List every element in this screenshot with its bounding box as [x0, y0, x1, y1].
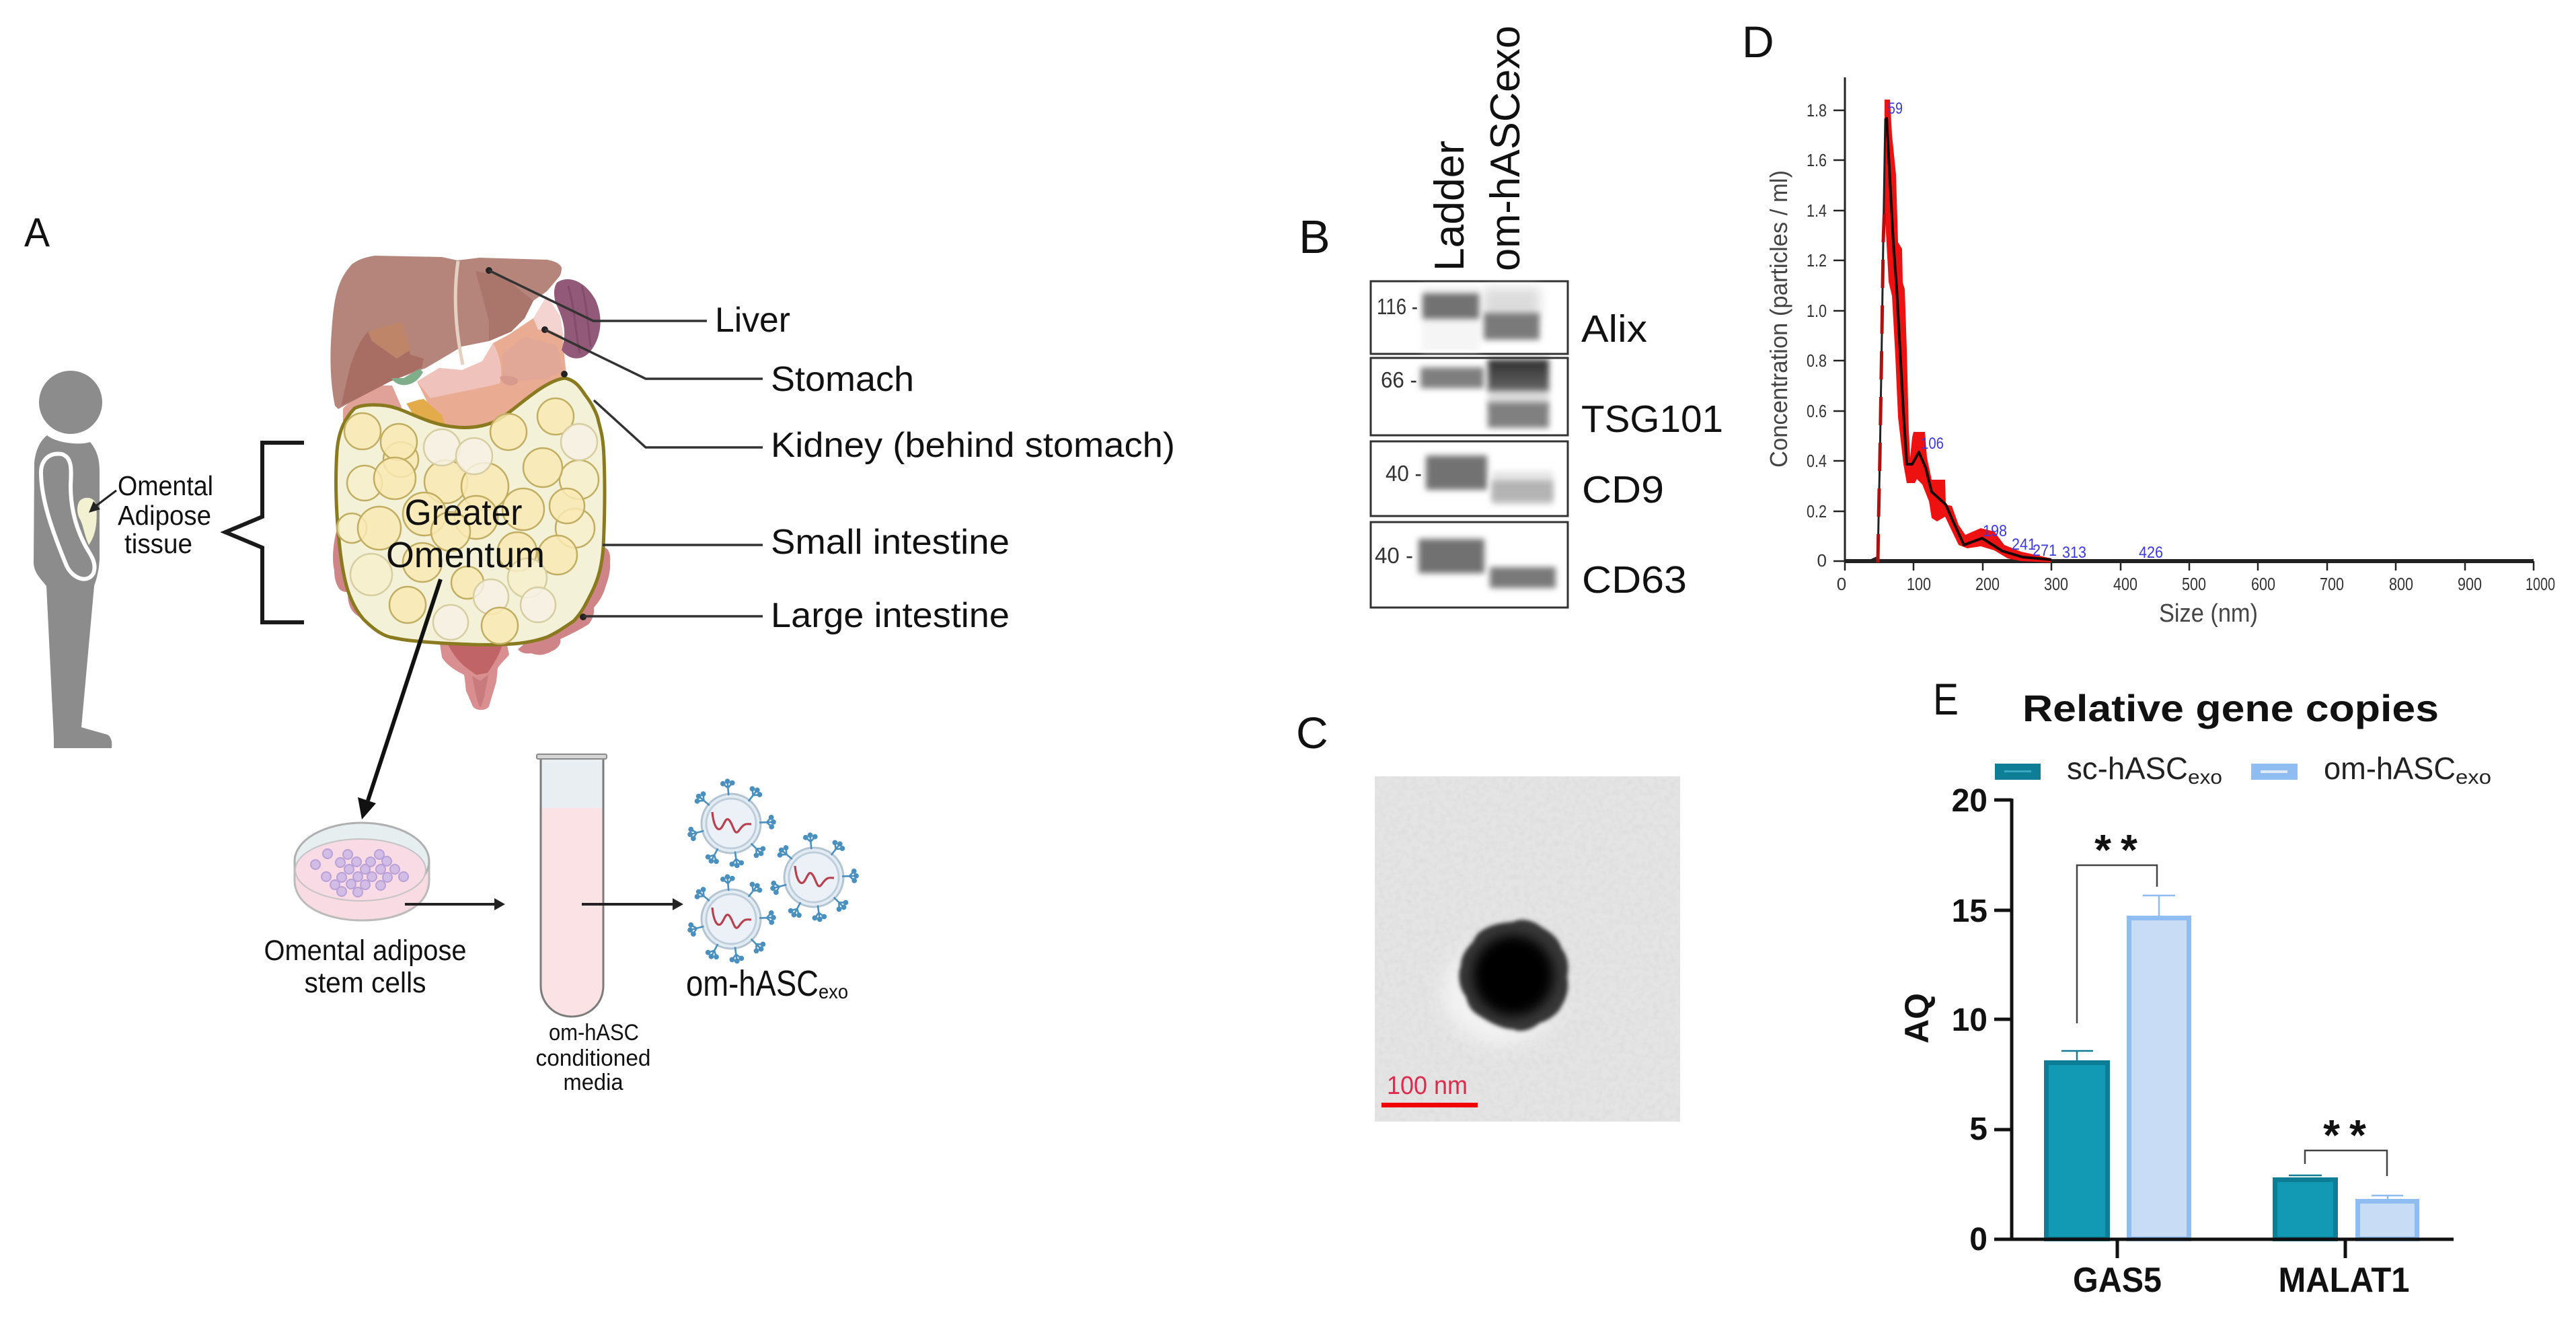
axes and ticks [1994, 799, 2454, 1258]
y tick labels [1807, 100, 1827, 571]
peak labels: 59 [1888, 100, 1903, 118]
legend: om-hASCexo: exo [2456, 766, 2491, 789]
blot: TSG101: 66 - [1381, 367, 1417, 392]
leader line: Liver [486, 267, 707, 321]
peak labels [1888, 100, 2163, 562]
y tick labels: 5 [1969, 1111, 1987, 1147]
y tick labels: 10 [1952, 1002, 1987, 1038]
y tick labels: 15 [1952, 893, 1987, 929]
gallbladder [391, 369, 423, 385]
x tick labels: 400 [2113, 574, 2137, 594]
y tick labels: 20 [1952, 783, 1987, 819]
legend: sc-hASCexo: exo [2188, 766, 2222, 789]
x tick labels: 300 [2044, 574, 2068, 594]
x tick labels: 0 [1837, 574, 1846, 594]
peak labels: 198 [1983, 522, 2007, 540]
blot: CD63 [1371, 522, 1568, 608]
particle body [1459, 920, 1568, 1031]
panel letter E: E [1933, 674, 1959, 724]
text: Greater Omentum: Omentum [386, 535, 545, 575]
panel letter A: A [24, 210, 50, 255]
blot: CD9: 40 - [1386, 461, 1422, 486]
y tick labels: 0.2 [1807, 501, 1827, 521]
blot: CD63: 40 - [1375, 543, 1413, 568]
x tick labels: 600 [2251, 574, 2275, 594]
pancreas [406, 399, 447, 431]
text: om-hASC conditioned media: om-hASC [549, 1020, 639, 1046]
text: om-hASC conditioned media: conditioned [535, 1046, 651, 1071]
label: Small intestine: Small intestine [771, 523, 1010, 562]
scale bar: 100 nm: 100 nm [1387, 1072, 1468, 1100]
blot: Alix [1371, 281, 1568, 354]
leader line: Large intestine [580, 614, 763, 620]
column header: om-hASCexo: om-hASCexo [1482, 26, 1529, 271]
y tick labels: 1.0 [1807, 301, 1827, 321]
axes and ticks [1833, 77, 2534, 571]
y axis label AQ: AQ [1898, 993, 1936, 1044]
label: Liver: Liver [715, 301, 790, 340]
x tick labels: 500 [2182, 574, 2206, 594]
panel letter C: C [1296, 708, 1328, 758]
legend: om-hASCexo [2251, 751, 2491, 789]
text: Greater Omentum: Greater [405, 492, 523, 533]
bracket linking body to omentum [225, 443, 304, 622]
panel E: relative gene copies bar chart [1898, 674, 2491, 1300]
y axis title: Concentration (particles / ml) [1765, 170, 1792, 468]
text: om-hASC conditioned media: media [564, 1070, 623, 1095]
y tick labels [1952, 783, 1987, 1257]
large intestine and rectum [333, 532, 610, 710]
text: Omental Adipose tissue: tissue [124, 528, 192, 559]
legend: om-hASCexo: om-hASC [2324, 751, 2456, 786]
gaps between organs [402, 343, 489, 405]
text: Omental Adipose tissue: Adipose [118, 500, 211, 531]
bar: MALAT1 sc-hASCexo [2275, 1175, 2335, 1239]
x tick labels: 1000 [2526, 574, 2555, 594]
y tick labels: 0 [1817, 550, 1827, 571]
panel B: western blot [1299, 26, 1723, 608]
label: om-hASCexo: exo [819, 981, 848, 1003]
image: TEM of exosome [1375, 776, 1680, 1122]
y tick labels: 1.4 [1807, 200, 1827, 221]
legend: sc-hASCexo: sc-hASC [2067, 751, 2188, 786]
duodenum [343, 386, 402, 431]
label: om-hASCexo: om-hASC [686, 963, 819, 1004]
arrow: dish to tube [405, 898, 505, 910]
icon: test tube with conditioned media [537, 754, 607, 1017]
adipocyte cells [337, 398, 599, 644]
size distribution curve with error band [1872, 100, 2051, 562]
label: TSG101: TSG101 [1581, 398, 1723, 441]
illustration: abdominal organs and greater omentum [330, 256, 610, 710]
significance bracket: MALAT1: ** [2323, 1111, 2376, 1159]
stomach [417, 296, 566, 431]
panel D: nanoparticle tracking chart [1742, 17, 2555, 628]
peak labels: 241 [2012, 536, 2036, 554]
x axis title: Size (nm) [2159, 599, 2258, 628]
arrow: omentum to culture dish [358, 579, 441, 819]
category label: GAS5: GAS5 [2073, 1261, 2162, 1300]
panel letter B: B [1299, 211, 1330, 263]
y tick labels: 0.8 [1807, 351, 1827, 371]
y tick labels: 1.2 [1807, 250, 1827, 270]
blot: CD9 [1371, 441, 1568, 516]
panel letter D: D [1742, 17, 1774, 67]
x tick labels: 700 [2320, 574, 2344, 594]
x tick labels: 900 [2458, 574, 2482, 594]
leader line: Kidney [561, 371, 763, 447]
arrow: omental adipose tissue pointer [89, 490, 116, 513]
text: Greater Omentum [386, 492, 545, 575]
text: Omental adipose stem cells: Omental adipose [264, 935, 467, 967]
category label: MALAT1: MALAT1 [2279, 1261, 2409, 1300]
liver [330, 256, 562, 409]
leader line: Stomach [541, 326, 763, 379]
greater omentum sac [336, 378, 605, 645]
peak labels: 426 [2139, 544, 2163, 562]
significance bracket: MALAT1 [2305, 1111, 2387, 1176]
label: Stomach: Stomach [771, 360, 914, 399]
label: CD63: CD63 [1582, 558, 1687, 601]
y tick labels: 1.6 [1807, 150, 1827, 170]
blot: TSG101 [1371, 358, 1568, 435]
peak labels: 106 [1921, 435, 1944, 453]
significance bracket: GAS5: ** [2094, 826, 2147, 874]
column header: Ladder: Ladder [1427, 141, 1473, 271]
leader line: Small intestine [603, 544, 763, 546]
label: CD9: CD9 [1582, 468, 1664, 511]
bar: GAS5 sc-hASCexo [2046, 1051, 2108, 1239]
y tick labels: 1.8 [1807, 100, 1827, 120]
peak labels: 271 [2033, 542, 2057, 560]
legend: sc-hASCexo [1995, 751, 2222, 789]
label: Alix: Alix [1581, 307, 1647, 351]
text: Omental Adipose tissue [118, 470, 213, 559]
chart title: Relative gene copies [2022, 687, 2439, 729]
x tick labels [1837, 574, 2555, 594]
text: om-hASC conditioned media [535, 1020, 651, 1095]
panel C: electron micrograph [1296, 708, 1680, 1122]
y tick labels: 0.4 [1807, 451, 1827, 471]
icon: exosomes [687, 779, 858, 963]
text: Omental Adipose tissue: Omental [118, 470, 213, 501]
label: Kidney: Kidney (behind stomach) [771, 426, 1175, 465]
bar: MALAT1 om-hASCexo [2358, 1196, 2417, 1239]
text: Omental adipose stem cells: stem cells [304, 967, 426, 999]
peak labels: 313 [2062, 544, 2086, 562]
x tick labels: 200 [1975, 574, 2000, 594]
blot: Alix: 116 - [1377, 294, 1418, 319]
panel A: omental adipose tissue to exosomes schematic [24, 210, 1175, 1095]
y tick labels: 0 [1969, 1222, 1987, 1257]
label: Large intestine: Large intestine [771, 596, 1010, 635]
cultured cells [311, 849, 408, 897]
spleen [554, 279, 601, 359]
icon: human figure with omental adipose tissue [34, 371, 112, 748]
icon: petri dish with adipose stem cells [295, 823, 429, 920]
bar: GAS5 om-hASCexo [2129, 895, 2189, 1239]
y tick labels: 0.6 [1807, 401, 1827, 421]
x tick labels: 100 [1907, 574, 1931, 594]
arrow: tube to exosomes [582, 898, 683, 910]
significance bracket: GAS5 [2077, 826, 2157, 1023]
x tick labels: 800 [2389, 574, 2413, 594]
text: Omental adipose stem cells [264, 935, 467, 999]
